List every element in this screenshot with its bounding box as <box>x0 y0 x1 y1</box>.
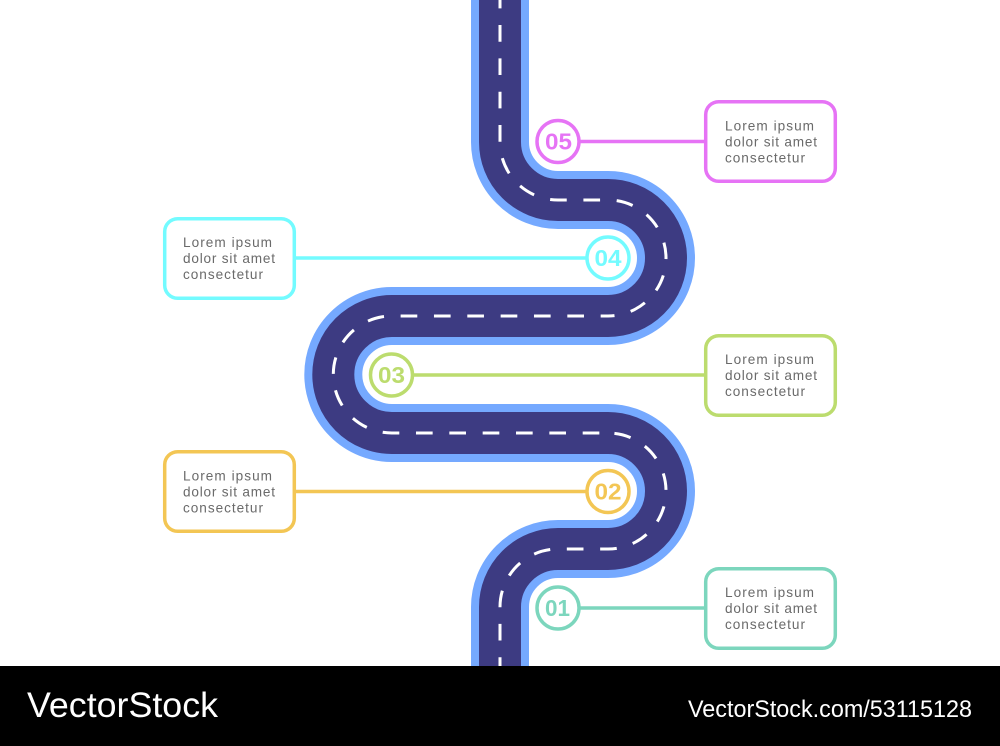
step 02: 02 <box>594 479 622 505</box>
step 03: Lorem ipsum <box>725 352 814 367</box>
footer logo: VectorStock <box>27 686 219 725</box>
step 03: consectetur <box>725 384 805 399</box>
step 02: dolor sit amet <box>183 484 275 500</box>
step 01 <box>537 569 835 648</box>
step 05: Lorem ipsum <box>725 118 814 134</box>
step 04: dolor sit amet <box>183 251 275 266</box>
step 01: consectetur <box>725 617 805 632</box>
step 05 <box>537 102 835 181</box>
step 03: dolor sit amet <box>725 368 817 383</box>
footer bar <box>0 666 1000 746</box>
step 05: 05 <box>545 129 572 155</box>
step 03: 03 <box>378 362 405 388</box>
step 03 <box>370 336 835 415</box>
step 01: dolor sit amet <box>725 601 817 616</box>
step 04: Lorem ipsum <box>183 235 272 250</box>
step 01: Lorem ipsum <box>725 585 814 600</box>
step 04: 04 <box>594 245 622 271</box>
footer image id: VectorStock.com/53115128 <box>688 696 972 723</box>
winding road <box>333 0 666 670</box>
step 02 <box>165 452 629 531</box>
step 02: Lorem ipsum <box>183 468 272 484</box>
step 04: consectetur <box>183 267 263 282</box>
step 02: consectetur <box>183 500 263 516</box>
step 01: 01 <box>545 595 570 621</box>
step 04 <box>165 219 629 298</box>
step 05: dolor sit amet <box>725 134 817 150</box>
step 05: consectetur <box>725 150 805 166</box>
